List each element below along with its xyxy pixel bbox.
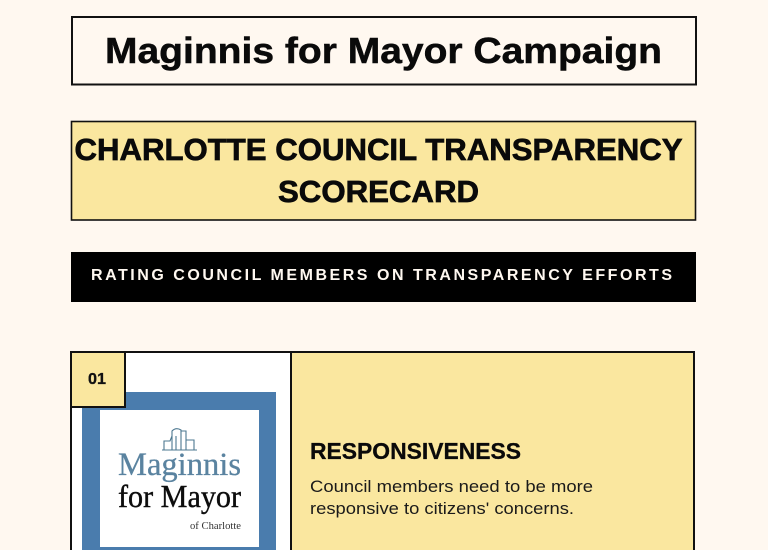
- title box: [72, 17, 696, 84]
- panel: responsiveness card: [71, 352, 694, 550]
- card outline: [71, 352, 694, 550]
- subtitle banner: [71, 252, 696, 302]
- title box: Maginnis for Mayor Campaign: [105, 30, 662, 71]
- number badge: 01: [88, 371, 106, 388]
- heading: scorecard: CHARLOTTE COUNCIL TRANSPARENCY: [74, 132, 683, 167]
- logo: Maginnis for Mayor: [82, 392, 276, 550]
- subtitle banner: RATING COUNCIL MEMBERS ON TRANSPARENCY EFFORTS: [91, 267, 672, 284]
- card description: responsive to citizens' concerns.: [310, 500, 574, 518]
- card description: Council members need to be more: [310, 478, 593, 496]
- card heading: RESPONSIVENESS: [310, 438, 521, 464]
- logo: Maginnis for Mayor: Maginnis: [118, 447, 241, 483]
- card description: [310, 478, 593, 518]
- card text column: [291, 352, 694, 550]
- logo: Maginnis for Mayor: of Charlotte: [190, 521, 241, 532]
- icon: city skyline: [162, 429, 197, 450]
- heading: scorecard: [72, 122, 696, 220]
- logo: Maginnis for Mayor: for Mayor: [118, 478, 241, 514]
- number badge: [71, 352, 125, 407]
- heading: scorecard: SCORECARD: [278, 174, 479, 209]
- card image column: [71, 352, 291, 550]
